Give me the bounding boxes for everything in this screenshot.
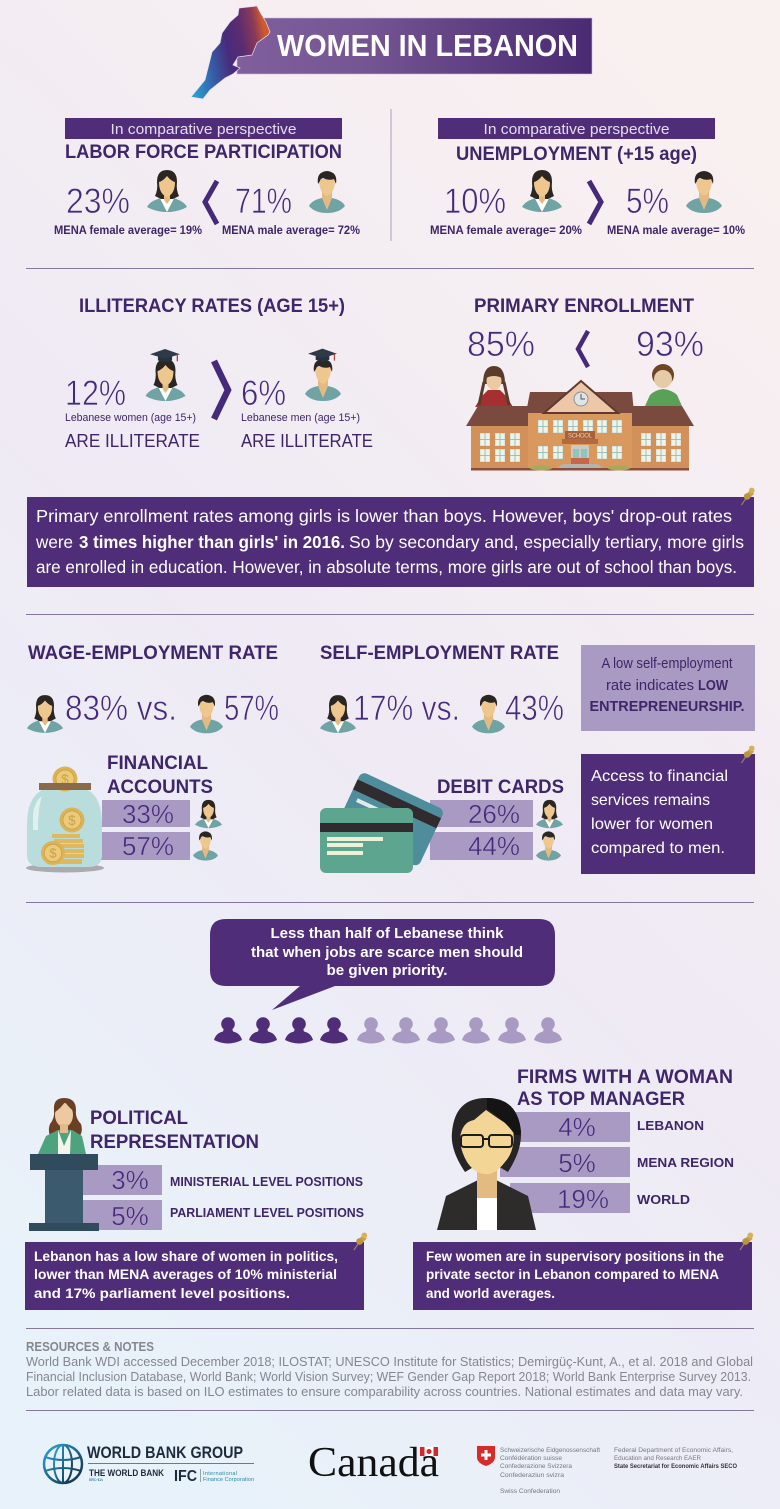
bar: Lebanon <box>500 1112 630 1142</box>
icon: map of Lebanon <box>191 6 270 99</box>
speech bubble: Less than half of Lebanese think <box>270 926 504 942</box>
female value: 23% <box>66 182 130 221</box>
callout: financial services: Access to financial <box>591 768 728 785</box>
bar: MENA region <box>500 1147 630 1178</box>
women value: 12% <box>65 374 126 413</box>
icon: man <box>686 171 722 213</box>
callout: financial services <box>581 746 755 874</box>
speech bubble: that when jobs are scarce men should <box>251 945 523 961</box>
icon: boy <box>645 364 682 406</box>
panel: firms with a woman as top manager <box>437 1067 734 1230</box>
icon: man <box>536 831 561 861</box>
logo: Swiss Confederation: Education and Research EAER <box>614 1455 701 1462</box>
logo: World Bank Group: IBRD · IDA <box>89 1477 103 1482</box>
panel: self-employment rate <box>320 643 564 733</box>
pictogram: 4 of 10 people <box>214 1017 562 1044</box>
header bar <box>65 118 342 139</box>
logo: Canada: Canada <box>308 1440 439 1486</box>
icon: man <box>472 695 505 733</box>
heading: FINANCIAL <box>107 753 208 774</box>
callout: low entrepreneurship <box>581 645 755 731</box>
heading: ILLITERACY RATES (AGE 15+) <box>79 296 345 317</box>
chevron: greater than <box>589 181 601 224</box>
callout: financial services: services remains <box>591 792 710 809</box>
title banner <box>191 6 592 99</box>
callout: financial services: compared to men. <box>591 840 725 857</box>
logo: Swiss Confederation: Schweizerische Eidgenossenschaft <box>500 1447 600 1454</box>
heading: PRIMARY ENROLLMENT <box>474 296 694 317</box>
icon: credit cards <box>320 771 445 873</box>
callout: supervisory positions note <box>413 1232 753 1310</box>
heading: AS TOP MANAGER <box>517 1089 685 1110</box>
callout: low entrepreneurship: LOW <box>698 678 728 694</box>
male average: MENA male average= 72% <box>222 223 360 237</box>
resources and notes: Financial Inclusion Database, World Bank; World Vision Survey; WEF Gender Gap Report 2018; World Bank Enterprise Survey 2013. <box>26 1370 751 1384</box>
heading <box>107 753 213 798</box>
heading <box>517 1067 733 1110</box>
icon: girl <box>475 366 513 407</box>
male average: MENA male average= 10% <box>607 223 745 237</box>
logo: Swiss Confederation: Federal Department of Economic Affairs, <box>614 1447 733 1454</box>
callout: low entrepreneurship: ENTREPRENEURSHIP. <box>590 699 744 715</box>
callout: enrollment note <box>27 488 755 587</box>
speech bubble <box>210 919 555 1010</box>
icon: pin <box>741 746 755 763</box>
icon: man <box>309 171 345 213</box>
bar: Lebanon: 4% <box>558 1112 596 1142</box>
text block: 3 times higher than girls' in 2016. <box>79 532 345 552</box>
icon: globe <box>44 1445 82 1483</box>
bar: ministerial: 3% <box>111 1165 149 1195</box>
icon: school building: SCHOOL <box>568 434 593 440</box>
heading: LABOR FORCE PARTICIPATION <box>65 142 342 163</box>
speech bubble: be given priority. <box>326 963 448 979</box>
chevron: less than <box>578 331 588 367</box>
panel: unemployment <box>430 118 745 237</box>
label: Lebanon: LEBANON <box>637 1119 704 1133</box>
icon: woman graduate <box>146 349 186 401</box>
logo: World Bank Group: THE WORLD BANK <box>89 1468 164 1479</box>
icon: savings jar <box>26 766 104 872</box>
logo: World Bank Group <box>44 1444 254 1485</box>
bar: world <box>510 1183 630 1214</box>
icon: businesswoman <box>437 1098 536 1230</box>
bar: women: 33% <box>122 799 174 829</box>
header bar: In comparative perspective <box>484 121 670 138</box>
comparison value: 57% <box>224 689 279 728</box>
boys value: 93% <box>636 325 704 364</box>
header bar: In comparative perspective <box>110 121 296 138</box>
logo: World Bank Group: IFC <box>174 1468 197 1485</box>
icon: pin <box>354 1232 367 1250</box>
logo: Swiss Confederation: Swiss Confederation <box>500 1488 560 1495</box>
icon: woman <box>27 695 63 733</box>
bar: men <box>95 831 190 861</box>
women statement: ARE ILLITERATE <box>65 431 200 451</box>
logo: Swiss Confederation <box>477 1446 737 1495</box>
callout: supervisory positions note: Few women are in supervisory positions in the <box>426 1248 724 1264</box>
men statement: ARE ILLITERATE <box>241 431 373 451</box>
logo: Swiss Confederation: State Secretariat for Economic Affairs SECO <box>614 1463 737 1470</box>
bar: men <box>430 831 533 861</box>
logo: Swiss Confederation: Confederaziun svizra <box>500 1472 564 1479</box>
men value: 6% <box>241 374 286 413</box>
icon: man <box>190 695 223 733</box>
icon: pin <box>740 1232 753 1250</box>
callout: politics note <box>25 1232 367 1310</box>
callout: politics note: lower than MENA averages of 10% ministerial <box>34 1266 337 1282</box>
panel: illiteracy rates <box>65 296 373 451</box>
text block: Primary enrollment rates among girls is lower than boys. However, boys' drop-out rates <box>36 506 732 526</box>
label: MENA region: MENA REGION <box>637 1156 734 1170</box>
logo: Swiss Confederation: Confederazione Svizzera <box>500 1463 572 1470</box>
panel: primary enrollment <box>466 296 704 470</box>
logo: World Bank Group: International <box>203 1471 237 1477</box>
icon: woman <box>195 800 222 828</box>
label: world: WORLD <box>637 1193 690 1207</box>
header bar <box>438 118 715 139</box>
men caption: Lebanese men (age 15+) <box>241 412 360 424</box>
bar: world: 19% <box>557 1184 609 1214</box>
text block: are enrolled in education. However, in absolute terms, more girls are out of school than boys. <box>36 557 737 577</box>
bar: ministerial <box>83 1165 162 1195</box>
heading: ACCOUNTS <box>107 777 213 798</box>
logo: World Bank Group: Finance Corporation <box>203 1477 254 1483</box>
icon: woman <box>147 170 187 212</box>
panel: financial accounts <box>26 753 222 872</box>
text block <box>35 506 744 577</box>
male value: 5% <box>626 182 669 221</box>
callout: supervisory positions note: private sector in Lebanon compared to MENA <box>426 1266 719 1282</box>
male value: 71% <box>235 182 292 221</box>
heading: POLITICAL <box>90 1108 188 1129</box>
bar: women <box>430 799 533 829</box>
icon: Swiss shield <box>477 1446 495 1466</box>
bar: MENA region: 5% <box>558 1148 596 1178</box>
bar: women <box>102 799 190 829</box>
bar: men: 57% <box>122 831 174 861</box>
comparison value: 43% <box>505 689 564 728</box>
chevron: greater than <box>214 361 228 419</box>
callout: low entrepreneurship: A low self-employment <box>602 656 732 672</box>
callout: politics note: and 17% parliament level positions. <box>34 1285 290 1301</box>
text block: So by secondary and, especially tertiary, more girls <box>349 532 744 552</box>
bar: women: 26% <box>468 799 520 829</box>
icon: Canadian flag <box>420 1447 438 1456</box>
heading: UNEMPLOYMENT (+15 age) <box>456 144 697 165</box>
icon: man graduate <box>305 349 341 401</box>
heading: DEBIT CARDS <box>437 777 564 798</box>
heading: WAGE-EMPLOYMENT RATE <box>28 643 278 664</box>
female average: MENA female average= 20% <box>430 223 582 237</box>
callout: supervisory positions note: and world averages. <box>426 1285 555 1301</box>
panel: wage-employment rate <box>27 643 279 733</box>
comparison value: 83% vs. <box>65 689 177 728</box>
icon: man <box>193 831 218 861</box>
resources and notes: RESOURCES & NOTES <box>26 1339 154 1354</box>
logo: Swiss Confederation: Confédération suisse <box>500 1455 562 1462</box>
bar: parliament: 5% <box>111 1201 149 1231</box>
callout: politics note: Lebanon has a low share of women in politics, <box>34 1248 338 1264</box>
panel: political representation <box>29 1098 364 1231</box>
heading <box>90 1108 259 1153</box>
women caption: Lebanese women (age 15+) <box>65 412 196 424</box>
title: WOMEN IN LEBANON <box>277 28 578 63</box>
callout: low entrepreneurship: rate indicates <box>606 678 694 694</box>
bar: men: 44% <box>468 831 520 861</box>
girls value: 85% <box>467 325 535 364</box>
bar: parliament <box>83 1200 162 1231</box>
icon: woman <box>522 170 562 212</box>
female value: 10% <box>444 182 506 221</box>
chevron: less than <box>205 181 217 224</box>
resources and notes: World Bank WDI accessed December 2018; ILOSTAT; UNESCO Institute for Statistics; Demirgüç-Kunt, A., et al. 2018 and Global <box>26 1355 753 1369</box>
heading: REPRESENTATION <box>90 1132 259 1153</box>
female average: MENA female average= 19% <box>54 223 202 237</box>
icon: school building <box>466 381 694 470</box>
icon: woman <box>320 695 356 733</box>
heading: SELF-EMPLOYMENT RATE <box>320 643 559 664</box>
label: parliament: PARLIAMENT LEVEL POSITIONS <box>170 1206 364 1220</box>
comparison value: 17% vs. <box>353 689 460 728</box>
heading: FIRMS WITH A WOMAN <box>517 1067 733 1088</box>
panel: labor force participation <box>54 118 360 237</box>
callout: financial services: lower for women <box>591 816 713 833</box>
icon: woman at podium <box>29 1098 99 1231</box>
icon: woman <box>536 800 563 828</box>
text block: were <box>35 532 73 552</box>
resources and notes <box>26 1339 753 1399</box>
logo: World Bank Group: WORLD BANK GROUP <box>87 1444 243 1462</box>
label: ministerial: MINISTERIAL LEVEL POSITIONS <box>170 1175 363 1189</box>
panel: debit cards <box>320 771 564 873</box>
resources and notes: Labor related data is based on ILO estimates to ensure comparability across countries. National estimates and data may vary. <box>26 1385 743 1399</box>
icon: pin <box>741 488 755 505</box>
